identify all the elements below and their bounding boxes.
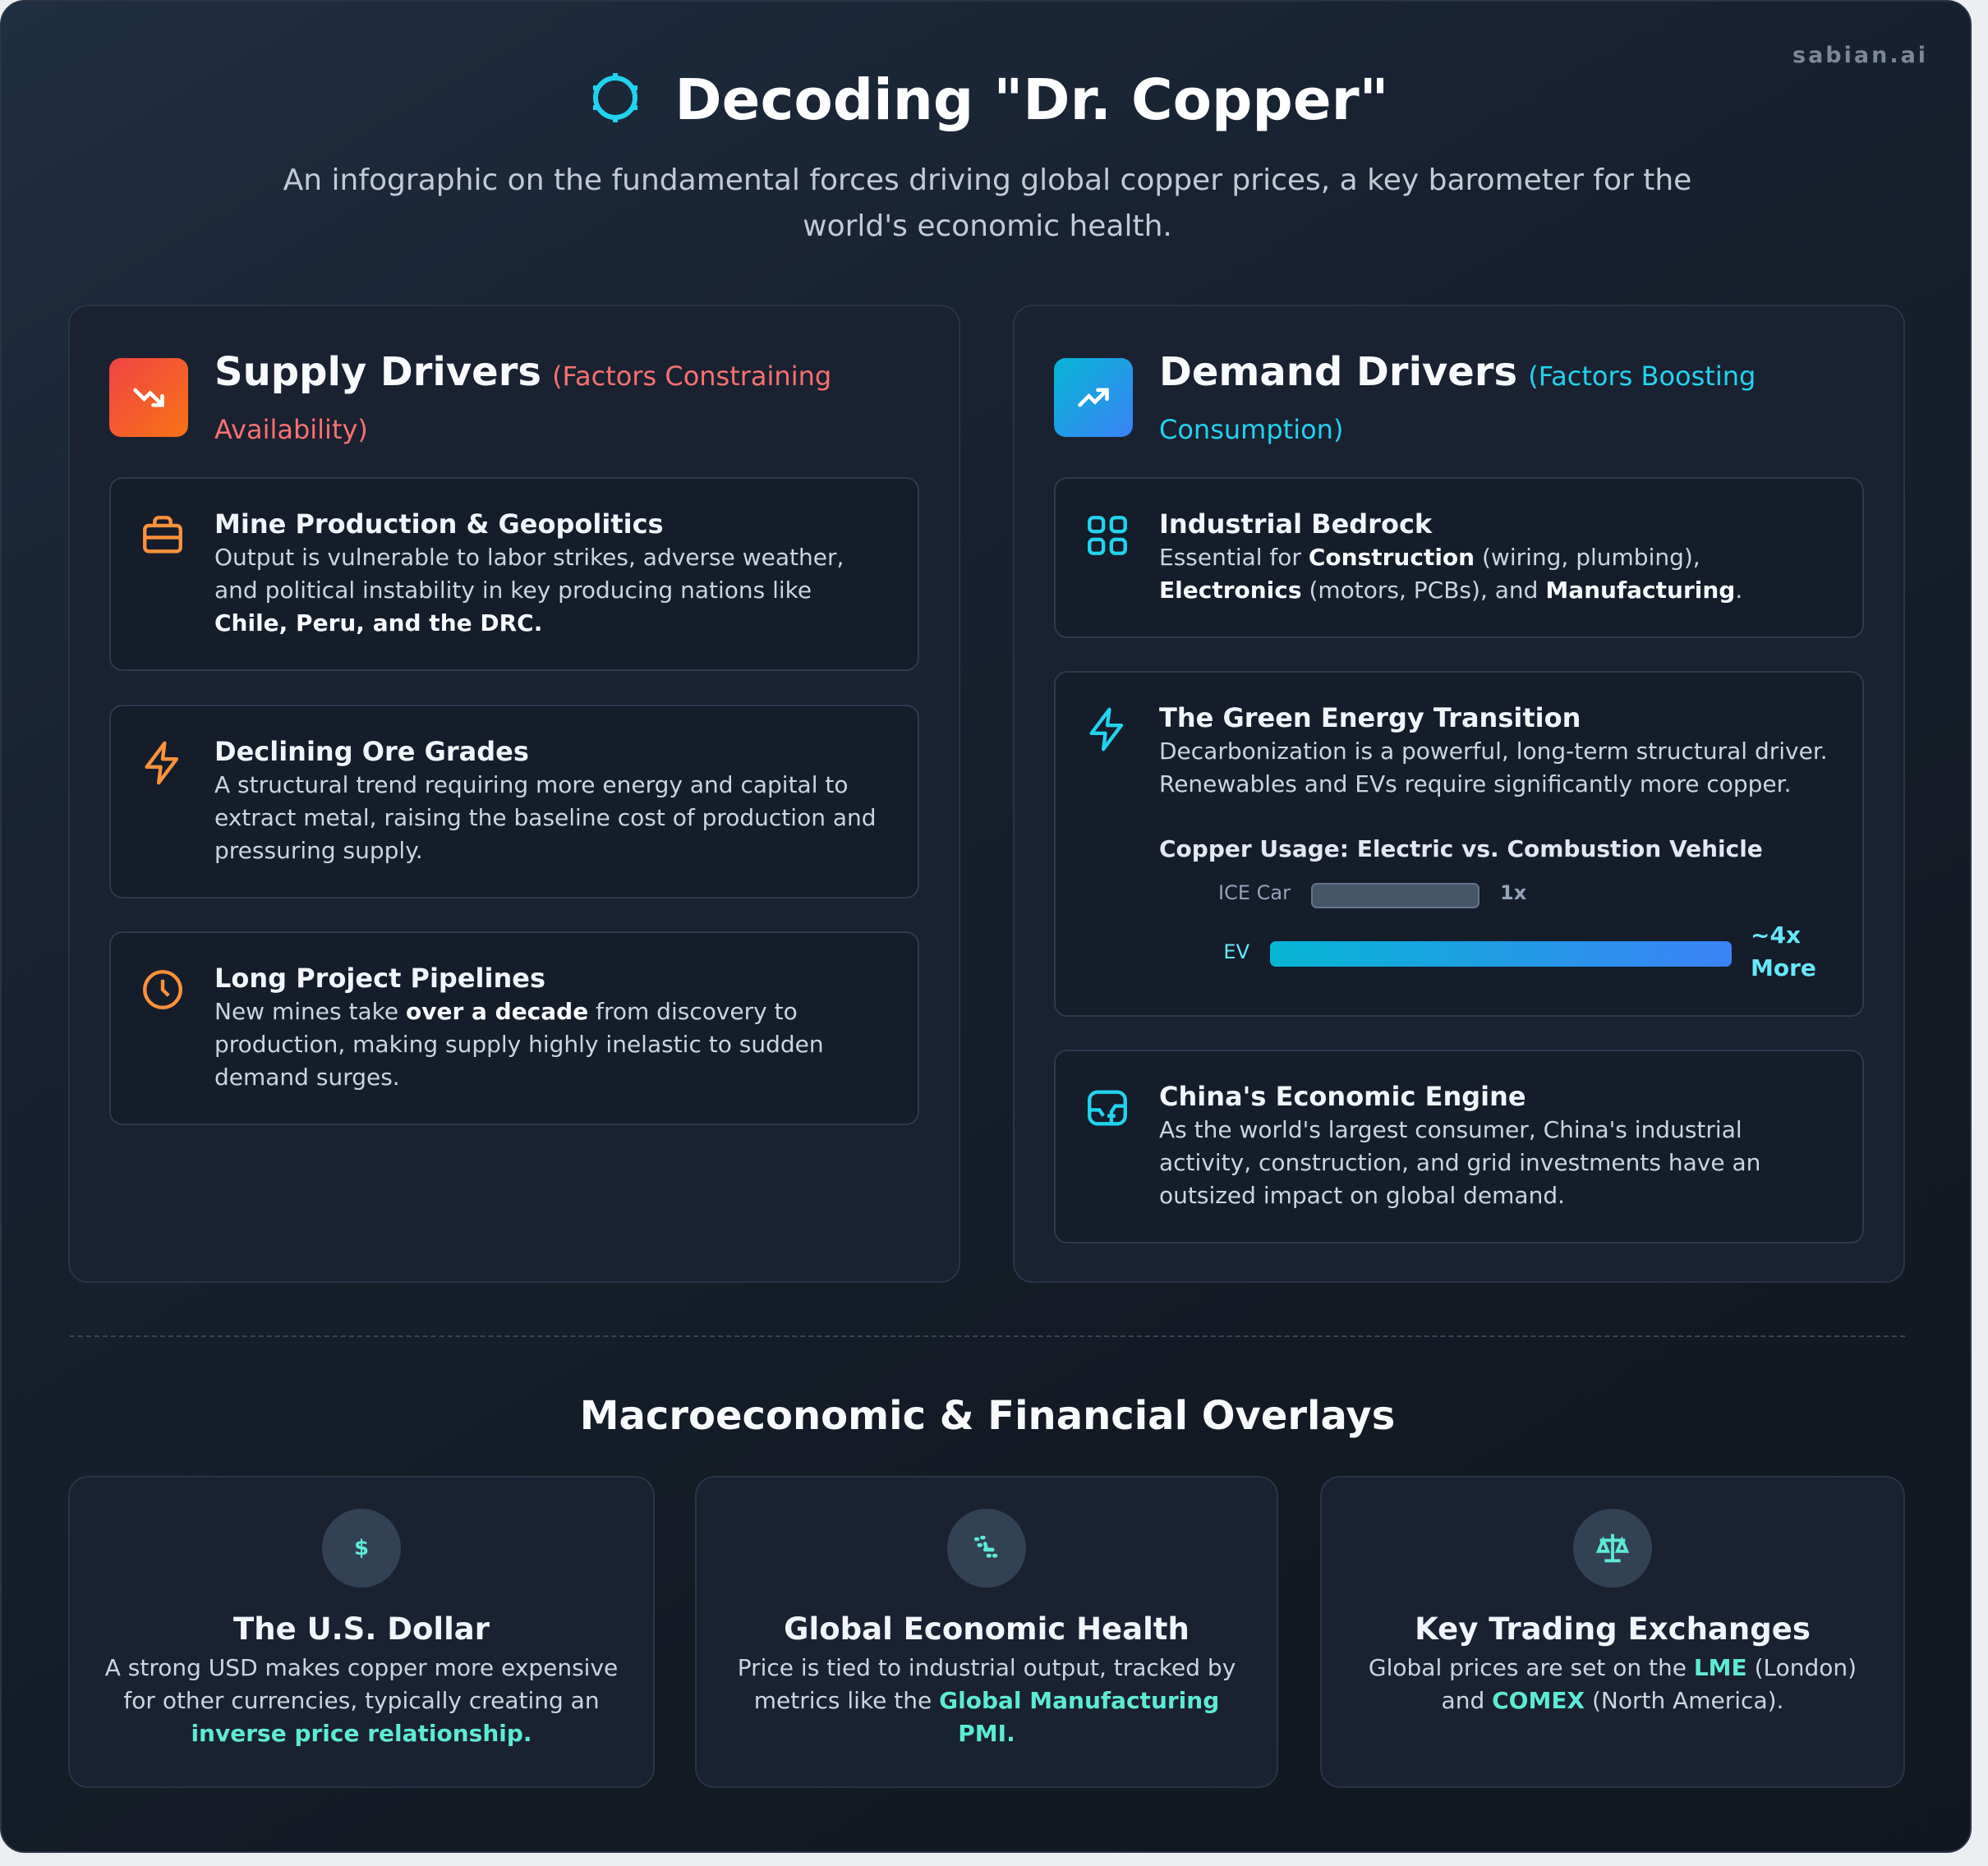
card: ore grades: Declining Ore Grades bbox=[214, 736, 529, 767]
bar chart: EV vs ICE: 1x bbox=[1500, 881, 1526, 904]
icon: bolt bbox=[145, 741, 179, 785]
card: china bbox=[1054, 1050, 1864, 1243]
card: mine production bbox=[109, 477, 919, 671]
panel: supply drivers bbox=[68, 305, 960, 1283]
card: US dollar: The U.S. Dollar bbox=[233, 1611, 490, 1647]
card: global economic health bbox=[695, 1476, 1278, 1788]
icon: trend up bbox=[1054, 358, 1133, 437]
card: industrial: Essential for Construction (wiring, plumbing), Electronics (motors, PCBs), and Manufacturing. bbox=[1159, 544, 1742, 604]
icon: gear bbox=[593, 73, 637, 122]
bar chart: EV vs ICE bbox=[1159, 835, 1816, 981]
icon: globe box bbox=[1088, 1091, 1127, 1125]
subtitle: An infographic on the fundamental forces driving global copper prices, a key barometer for the world's economic health. bbox=[283, 163, 1691, 243]
card: global economic health: Global Economic Health bbox=[784, 1611, 1190, 1647]
card: mine production: Output is vulnerable to labor strikes, adverse weather, and political instability in key producing nations like Chile, Peru, and the DRC. bbox=[214, 544, 844, 637]
card: pipelines: New mines take over a decade from discovery to production, making supply highly inelastic to sudden demand surges. bbox=[214, 998, 824, 1091]
card: exchanges bbox=[1320, 1476, 1905, 1788]
icon: bolt bbox=[1089, 708, 1124, 751]
heading: Supply Drivers (Factors Constraining Availability) bbox=[214, 349, 831, 445]
bar chart: EV vs ICE: Copper Usage: Electric vs. Combustion Vehicle bbox=[1159, 835, 1763, 862]
card: pipelines: Long Project Pipelines bbox=[214, 963, 545, 994]
card: green energy: Decarbonization is a powerful, long-term structural driver. Renewables and EVs require significantly more copper. bbox=[1159, 738, 1828, 797]
card: exchanges: Key Trading Exchanges bbox=[1415, 1611, 1811, 1647]
panel: demand drivers bbox=[1013, 305, 1905, 1283]
card: ore grades bbox=[109, 705, 919, 899]
icon: dollar bbox=[322, 1509, 401, 1588]
card: industrial bbox=[1054, 477, 1864, 638]
bar chart: EV vs ICE: ICE Car bbox=[1218, 881, 1291, 904]
card: exchanges: Global prices are set on the LME (London) and COMEX (North America). bbox=[1369, 1654, 1857, 1714]
icon: clock bbox=[143, 970, 182, 1009]
icon: trend down bbox=[109, 358, 188, 437]
bar chart: EV vs ICE: ~4x bbox=[1751, 922, 1801, 949]
card: global economic health: Price is tied to industrial output, tracked by metrics like the Global Manufacturing PMI. bbox=[738, 1654, 1236, 1747]
card: pipelines bbox=[109, 931, 919, 1125]
card: green energy: The Green Energy Transition bbox=[1159, 702, 1581, 733]
brand: sabian.ai bbox=[1792, 43, 1928, 68]
bar chart: EV vs ICE: EV bbox=[1223, 940, 1249, 963]
heading: Demand Drivers (Factors Boosting Consumption) bbox=[1159, 349, 1756, 445]
icon: scatter bbox=[947, 1509, 1026, 1588]
card: china: As the world's largest consumer, China's industrial activity, construction, and grid investments have an outsized impact on global demand. bbox=[1159, 1116, 1760, 1209]
card: industrial: Industrial Bedrock bbox=[1159, 508, 1432, 540]
section heading: macro: Macroeconomic & Financial Overlays bbox=[580, 1393, 1395, 1439]
icon: scales bbox=[1573, 1509, 1652, 1588]
icon: grid bbox=[1088, 516, 1127, 555]
card: green energy bbox=[1054, 671, 1864, 1017]
icon: briefcase bbox=[143, 516, 182, 554]
card: US dollar: A strong USD makes copper more expensive for other currencies, typically creating an inverse price relationship. bbox=[105, 1654, 618, 1747]
card: china: China's Economic Engine bbox=[1159, 1081, 1526, 1112]
icon: dollar: $ bbox=[354, 1536, 369, 1560]
card: US dollar bbox=[68, 1476, 655, 1788]
card: ore grades: A structural trend requiring more energy and capital to extract metal, raising the baseline cost of production and pressuring supply. bbox=[214, 771, 877, 864]
card: mine production: Mine Production & Geopolitics bbox=[214, 508, 664, 540]
title: Decoding "Dr. Copper" bbox=[674, 67, 1389, 133]
bar chart: EV vs ICE: More bbox=[1751, 954, 1816, 981]
